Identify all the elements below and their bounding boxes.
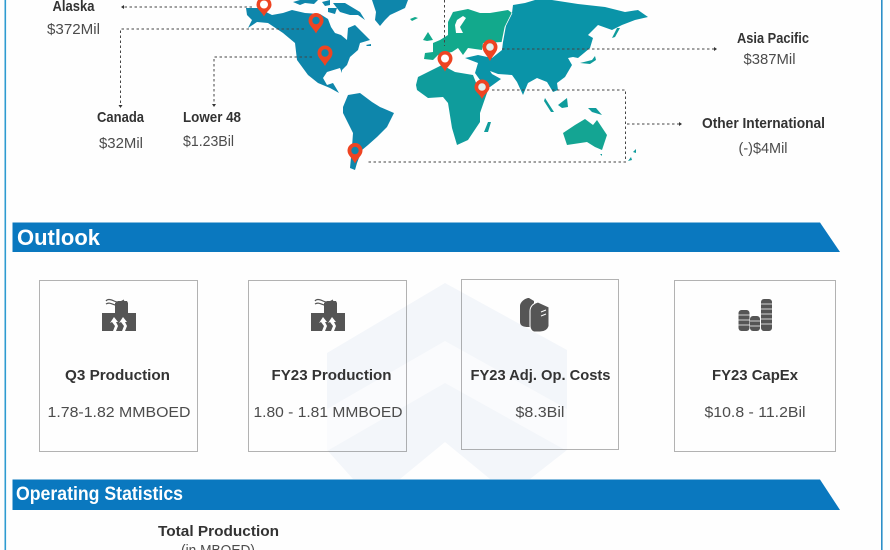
text: q3 production: 1.78-1.82 MMBOED bbox=[48, 404, 191, 421]
watermark logo bbox=[327, 283, 567, 479]
banner: operating statistics: Operating Statistics bbox=[16, 484, 183, 505]
text: fy23 production bbox=[254, 367, 403, 421]
text: fy23 capex bbox=[704, 367, 806, 421]
label: other international: (-)$4Mil bbox=[738, 140, 788, 157]
text: fy23 production: 1.80 - 1.81 MMBOED bbox=[254, 404, 403, 421]
map: north america bbox=[246, 0, 408, 93]
label: lower 48 bbox=[183, 109, 241, 150]
pin: east africa bbox=[474, 80, 490, 99]
map: europe bbox=[424, 9, 512, 60]
text: fy23 adj op costs bbox=[470, 367, 610, 421]
map: baltic sea bbox=[455, 16, 466, 33]
text: q3 production bbox=[48, 367, 191, 421]
label: canada: $32Mil bbox=[99, 135, 143, 152]
icon: factory bbox=[311, 299, 345, 331]
map: islands bbox=[410, 17, 636, 161]
banner: outlook bbox=[12, 222, 840, 252]
map: australia bbox=[563, 119, 607, 150]
banner: outlook: Outlook bbox=[17, 225, 101, 250]
pin: caspian bbox=[482, 40, 498, 61]
icon: books bbox=[520, 298, 549, 332]
panel: fy23 production bbox=[248, 280, 406, 452]
world map bbox=[246, 0, 648, 170]
label: alaska: $372Mil bbox=[47, 21, 100, 38]
label: alaska bbox=[47, 0, 100, 38]
banner: operating statistics bbox=[12, 480, 840, 510]
label: other international: Other International bbox=[702, 115, 825, 132]
label: asia pacific: $387Mil bbox=[744, 51, 796, 68]
pin: europe bbox=[438, 51, 452, 72]
pin: south america bbox=[348, 143, 362, 164]
label: other international bbox=[702, 115, 825, 157]
panel: fy23 adj op costs bbox=[462, 280, 618, 450]
map: asia bbox=[465, 0, 648, 95]
panel: q3 production bbox=[40, 280, 198, 452]
map: south america bbox=[343, 93, 394, 170]
pin: lower 48 bbox=[318, 46, 332, 66]
label: total production: Total Production bbox=[158, 523, 279, 540]
pin: alaska bbox=[256, 0, 272, 16]
text: fy23 capex: $10.8 - 11.2Bil bbox=[704, 404, 806, 421]
text: q3 production: Q3 Production bbox=[65, 367, 170, 384]
label: asia pacific bbox=[737, 30, 809, 68]
text: fy23 production: FY23 Production bbox=[272, 367, 392, 384]
text: fy23 capex: FY23 CapEx bbox=[712, 367, 799, 384]
text: fy23 adj op costs: $8.3Bil bbox=[516, 404, 564, 421]
label: lower 48: $1.23Bil bbox=[183, 133, 234, 150]
map: africa bbox=[416, 65, 488, 145]
panel: fy23 capex bbox=[674, 280, 836, 452]
label: asia pacific: Asia Pacific bbox=[737, 30, 809, 47]
icon: coin stacks bbox=[738, 299, 772, 331]
label: canada: Canada bbox=[97, 109, 145, 126]
text: fy23 adj op costs: FY23 Adj. Op. Costs bbox=[470, 367, 610, 384]
map: urals line bbox=[502, 13, 512, 42]
map: madagascar bbox=[484, 122, 491, 132]
pin: canada bbox=[308, 13, 324, 34]
label: total production bbox=[158, 523, 279, 550]
connector lines bbox=[118, 0, 717, 162]
icon: factory bbox=[102, 299, 136, 331]
label: lower 48: Lower 48 bbox=[183, 109, 241, 126]
label: canada bbox=[97, 109, 145, 152]
